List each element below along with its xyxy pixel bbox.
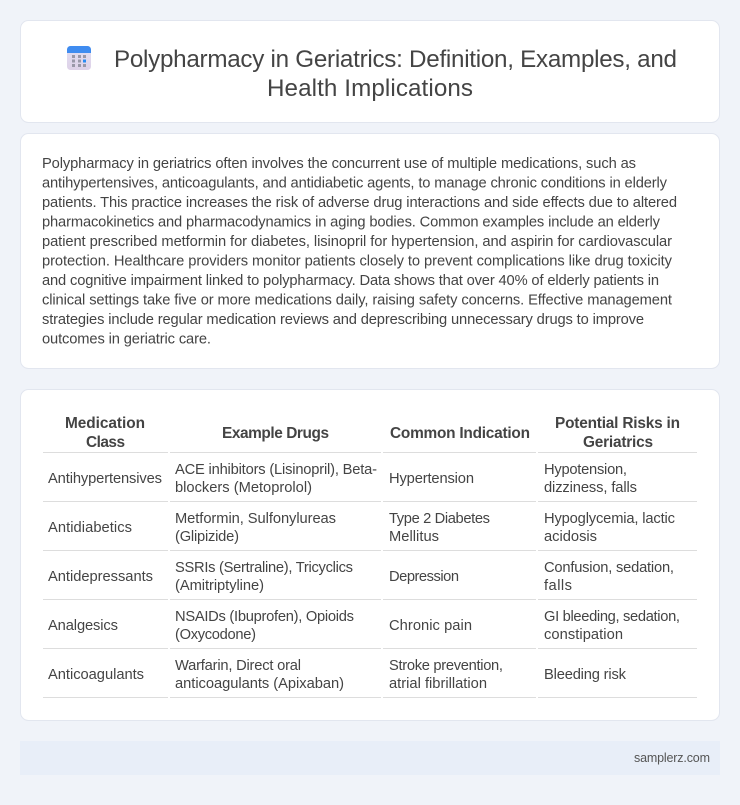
text block: description paragraph: Polypharmacy in geriatrics often involves the concurrent use of multiple medications, such as	[42, 156, 636, 172]
text block: description paragraph: strategies include regular medication reviews and deprescribing unnecessary drugs to improve	[42, 312, 644, 328]
text block: description paragraph: and cognitive impairment linked to polypharmacy. Data shows that over 40% of elderly patients in	[42, 273, 659, 289]
table header row: Potential Risks in	[555, 415, 680, 432]
text block: description paragraph: patient prescribed metformin for diabetes, lisinopril for hypertension, and aspirin for cardiovascular	[42, 234, 672, 250]
table row: Analgesics: (Oxycodone)	[175, 627, 256, 643]
table row: Anticoagulants: atrial fibrillation	[389, 676, 487, 692]
panel: medication table	[20, 390, 720, 720]
table row: Antidepressants	[48, 560, 674, 594]
table header row: Class	[86, 434, 125, 451]
table row: Antidiabetics	[48, 511, 675, 545]
table row: Antihypertensives: Hypotension,	[544, 462, 627, 478]
table row: Antidepressants: SSRIs (Sertraline), Tricyclics	[175, 560, 353, 576]
text block: description paragraph: patients. This practice increases the risk of adverse drug interactions and side effects due to altered	[42, 195, 677, 211]
icon: calendar	[67, 46, 91, 70]
table row: Antidepressants: Depression	[389, 569, 459, 585]
table row: Antidiabetics: Antidiabetics	[48, 520, 132, 536]
table row: Antidepressants: Confusion, sedation,	[544, 560, 674, 576]
table header row: Geriatrics	[583, 434, 653, 451]
table row: Analgesics: constipation	[544, 627, 623, 643]
table row: Analgesics: NSAIDs (Ibuprofen), Opioids	[175, 609, 354, 625]
title: Polypharmacy in Geriatrics: Definition, Examples, and	[114, 46, 677, 73]
title: Health Implications	[267, 75, 473, 102]
table row: Analgesics: GI bleeding, sedation,	[544, 609, 680, 625]
table row: Antihypertensives: dizziness, falls	[544, 480, 637, 496]
table row: Antihypertensives: blockers (Metoprolol)	[175, 480, 312, 496]
table row: Anticoagulants: Warfarin, Direct oral	[175, 658, 301, 674]
table row: Antidepressants: Antidepressants	[48, 569, 153, 585]
table row: Analgesics: Chronic pain	[389, 618, 472, 634]
table header row: Example Drugs	[222, 425, 329, 442]
table header row	[65, 415, 680, 451]
text block: description paragraph: protection. Healthcare providers monitor patients closely to prevent complications like drug toxicity	[42, 254, 673, 270]
text block: description paragraph: clinical settings take five or more medications daily, raising safety concerns. Effective management	[42, 292, 672, 308]
footer	[20, 741, 720, 775]
table row: Antidiabetics: (Glipizide)	[175, 529, 239, 545]
text block: description paragraph	[42, 156, 677, 348]
panel: description	[20, 134, 720, 368]
table row: Anticoagulants: Anticoagulants	[48, 667, 144, 683]
table row: Antidiabetics: acidosis	[544, 529, 597, 545]
table header row: Common Indication	[390, 425, 530, 442]
table row: Anticoagulants: Stroke prevention,	[389, 658, 503, 674]
table row: Anticoagulants	[48, 658, 627, 692]
text block: description paragraph: antihypertensives, anticoagulants, and antidiabetic agents, to manage chronic conditions in elderly	[42, 176, 668, 192]
title	[114, 46, 677, 102]
footer: samplerz.com	[634, 751, 710, 765]
title card	[20, 20, 720, 122]
table row: Antidepressants: falls	[544, 578, 572, 594]
table row: Antidiabetics: Type 2 Diabetes	[389, 511, 490, 527]
table row: Antihypertensives: Hypertension	[389, 471, 474, 487]
table row: Antidiabetics: Mellitus	[389, 529, 439, 545]
table row: Analgesics: Analgesics	[48, 618, 118, 634]
table row: Antihypertensives: ACE inhibitors (Lisinopril), Beta-	[175, 462, 377, 478]
table row: Antihypertensives	[48, 462, 637, 496]
table row: Analgesics	[48, 609, 680, 643]
table header row: Medication	[65, 415, 145, 432]
text block: description paragraph: pharmacokinetics and pharmacodynamics in aging bodies. Common examples include an elderly	[42, 214, 661, 230]
table row: Antidiabetics: Hypoglycemia, lactic	[544, 511, 675, 527]
text block: description paragraph: outcomes in geriatric care.	[42, 332, 211, 348]
table row: Anticoagulants: Bleeding risk	[544, 667, 627, 683]
table row: Antihypertensives: Antihypertensives	[48, 471, 162, 487]
table row: Anticoagulants: anticoagulants (Apixaban)	[175, 676, 344, 692]
table row: Antidepressants: (Amitriptyline)	[175, 578, 264, 594]
table row: Antidiabetics: Metformin, Sulfonylureas	[175, 511, 336, 527]
